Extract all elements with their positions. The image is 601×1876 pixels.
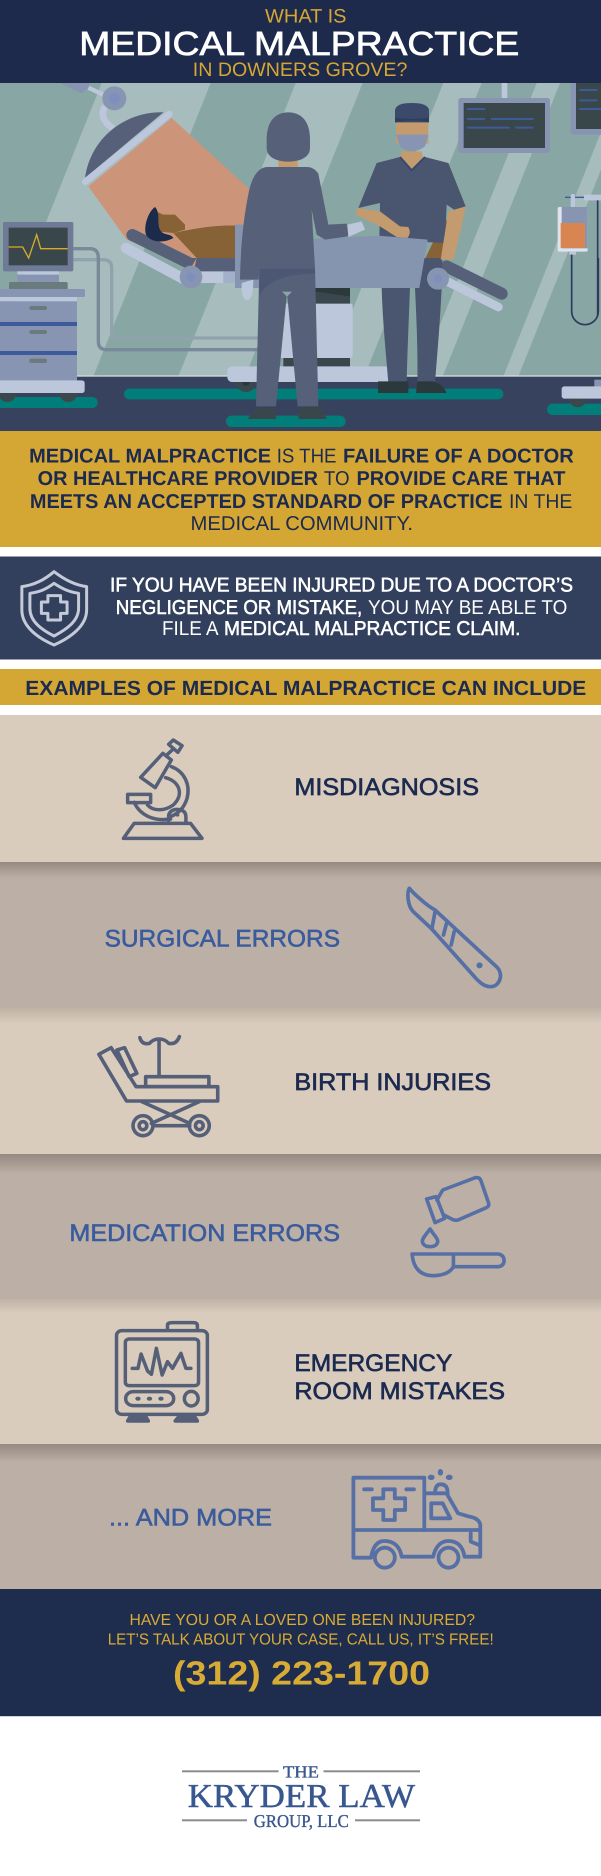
gold definition panel: OR HEALTHCARE PROVIDER <box>38 468 319 490</box>
title: medical malpractice: MEDICAL MALPRACTICE <box>79 26 519 63</box>
row: surgical errors <box>0 862 601 1008</box>
footer call to action: LET’S TALK ABOUT YOUR CASE, CALL US, IT’S FREE! <box>108 1631 494 1648</box>
gold definition panel: IS THE <box>277 445 336 467</box>
icon: ambulance <box>353 1469 480 1568</box>
bed pivots <box>180 266 449 290</box>
gold definition panel: TO <box>324 468 350 490</box>
title: what is: WHAT IS <box>265 6 346 28</box>
gold definition panel: FAILURE OF A DOCTOR <box>343 445 574 467</box>
examples heading: EXAMPLES OF MEDICAL MALPRACTICE CAN INCLUDE <box>25 677 586 700</box>
logo: GROUP, LLC <box>254 1811 349 1831</box>
icon: heart monitor <box>117 1323 207 1421</box>
ceiling monitor <box>458 80 601 153</box>
navy notice panel: FILE A <box>162 618 219 640</box>
footer call to action: HAVE YOU OR A LOVED ONE BEEN INJURED? <box>130 1612 475 1629</box>
icon: scalpel <box>408 888 500 987</box>
navy notice panel <box>0 556 601 660</box>
gold definition panel: MEETS AN ACCEPTED STANDARD OF PRACTICE <box>30 491 503 513</box>
gold definition panel: IN THE <box>509 491 572 513</box>
wall with diagonal light stripes <box>0 83 601 376</box>
navy notice panel: MEDICAL MALPRACTICE CLAIM. <box>224 618 520 640</box>
icon: microscope <box>123 740 202 838</box>
navy notice panel: IF YOU HAVE BEEN INJURED DUE TO A DOCTOR’S <box>110 575 573 597</box>
label: MISDIAGNOSIS <box>294 774 479 801</box>
iv bag <box>558 194 601 325</box>
row: and more <box>0 1444 601 1589</box>
medical cart with monitor <box>0 222 85 402</box>
label: SURGICAL ERRORS <box>105 926 340 953</box>
floor <box>0 375 601 431</box>
right side cart <box>562 380 601 407</box>
footer call to action <box>0 1589 601 1717</box>
label: BIRTH INJURIES <box>294 1069 491 1096</box>
gold definition panel: MEDICAL MALPRACTICE <box>29 445 271 467</box>
tubes <box>73 249 263 350</box>
surgical lamp <box>60 83 257 258</box>
row: birth injuries <box>0 1008 601 1154</box>
logo: KRYDER LAW <box>188 1778 415 1815</box>
bed <box>126 235 502 392</box>
label: ROOM MISTAKES <box>294 1378 505 1405</box>
label: MEDICATION ERRORS <box>69 1220 340 1247</box>
row: medication errors <box>0 1154 601 1299</box>
gold definition panel: MEDICAL COMMUNITY. <box>190 513 413 535</box>
blanket <box>235 225 428 288</box>
icon: hospital bed <box>99 1037 218 1136</box>
label: EMERGENCY <box>294 1350 452 1377</box>
examples heading <box>0 669 601 705</box>
header banner <box>0 0 601 83</box>
navy notice panel: NEGLIGENCE OR MISTAKE, <box>116 597 362 619</box>
logo: THE <box>283 1762 319 1781</box>
label: ... AND MORE <box>109 1505 272 1532</box>
logo <box>182 1762 420 1831</box>
label <box>294 1350 505 1405</box>
patient <box>145 207 448 269</box>
row: misdiagnosis <box>0 715 601 862</box>
male surgeon <box>356 103 466 393</box>
phone number: (312) 223-1700 <box>173 1656 430 1693</box>
title: in downers grove: IN DOWNERS GROVE? <box>193 59 408 81</box>
row: emergency room mistakes <box>0 1299 601 1444</box>
gold definition panel: PROVIDE CARE THAT <box>356 468 565 490</box>
illustration: operating room scene <box>0 83 601 431</box>
icon: medicine bottle and spoon <box>412 1178 504 1276</box>
navy notice panel: YOU MAY BE ABLE TO <box>368 597 567 619</box>
icon: shield with cross <box>22 572 87 645</box>
gold definition panel <box>0 431 601 547</box>
female doctor <box>240 112 365 419</box>
